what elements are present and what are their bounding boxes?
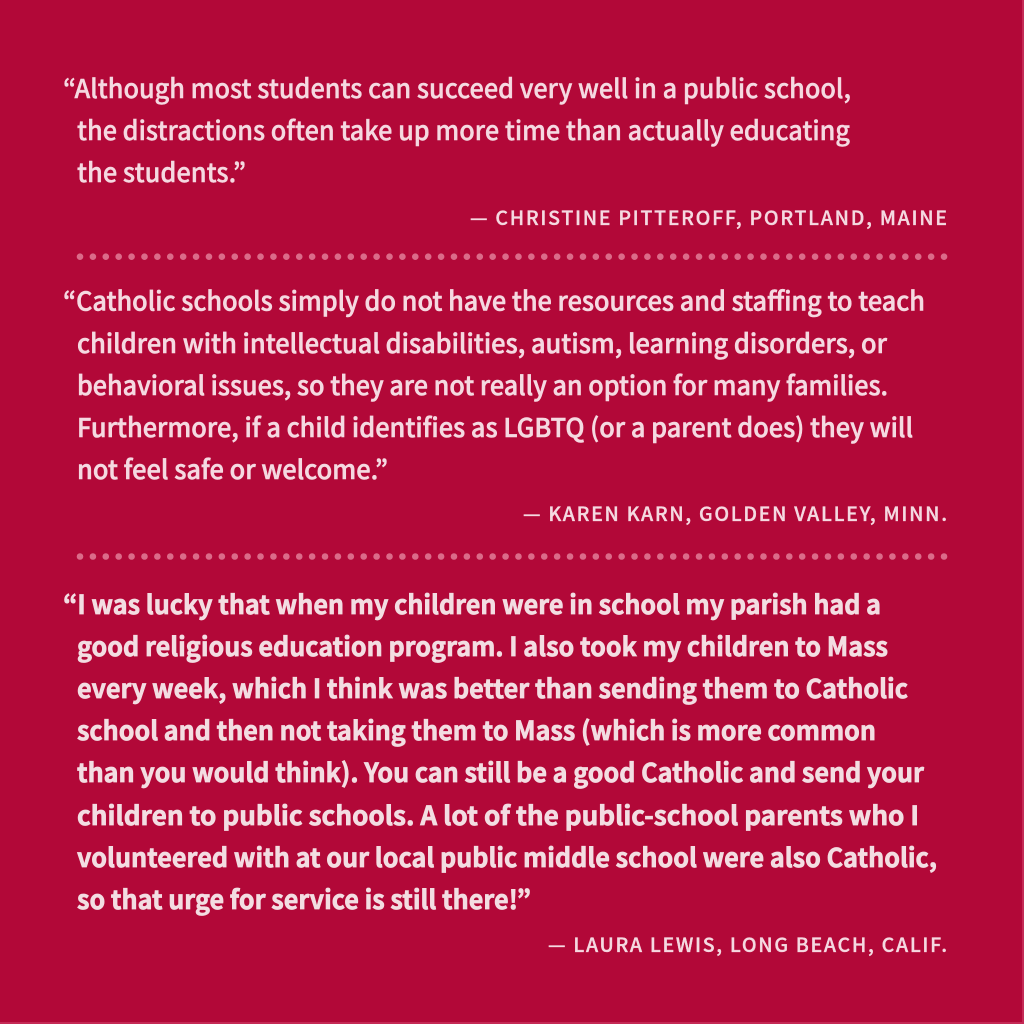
quote: Christine Pitteroff: the students.” xyxy=(77,153,246,190)
quote: Laura Lewis: than you would think). You can still be a good Catholic and send your xyxy=(77,753,925,790)
quote: Laura Lewis: good religious education program. I also took my children to Mass xyxy=(77,627,888,664)
quote: Karen Karn: behavioral issues, so they are not really an option for many families. xyxy=(77,366,888,403)
quote: Karen Karn: “Catholic schools simply do not have the resources and staffing to teach xyxy=(63,282,925,318)
quote: Christine Pitteroff: “Although most students can succeed very well in a public school, xyxy=(63,69,851,106)
quote: Laura Lewis: so that urge for service is still there!” xyxy=(77,880,531,917)
quote: Karen Karn xyxy=(63,282,925,487)
attribution: Karen Karn: — KAREN KARN, GOLDEN VALLEY, MINN. xyxy=(523,498,947,527)
quote: Laura Lewis: volunteered with at our local public middle school were also Catholic, xyxy=(77,838,937,875)
quote: Christine Pitteroff xyxy=(63,69,851,190)
quote: Karen Karn: not feel safe or welcome.” xyxy=(77,450,388,487)
attribution: Christine Pitteroff: — CHRISTINE PITTEROFF, PORTLAND, MAINE xyxy=(470,202,947,231)
quote: Laura Lewis: every week, which I think was better than sending them to Catholic xyxy=(77,669,908,706)
quote: Karen Karn: children with intellectual disabilities, autism, learning disorders, or xyxy=(77,324,887,361)
quote: Christine Pitteroff: the distractions often take up more time than actually educating xyxy=(77,111,850,148)
quote: Laura Lewis: school and then not taking them to Mass (which is more common xyxy=(77,711,876,748)
quote: Laura Lewis xyxy=(63,585,937,917)
quote: Karen Karn: Furthermore, if a child identifies as LGBTQ (or a parent does) they will xyxy=(77,408,913,445)
quote: Laura Lewis: “I was lucky that when my children were in school my parish had a xyxy=(63,585,881,622)
attribution: Laura Lewis: — LAURA LEWIS, LONG BEACH, CALIF. xyxy=(548,929,947,958)
quote: Laura Lewis: children to public schools. A lot of the public-school parents who I xyxy=(77,796,919,833)
